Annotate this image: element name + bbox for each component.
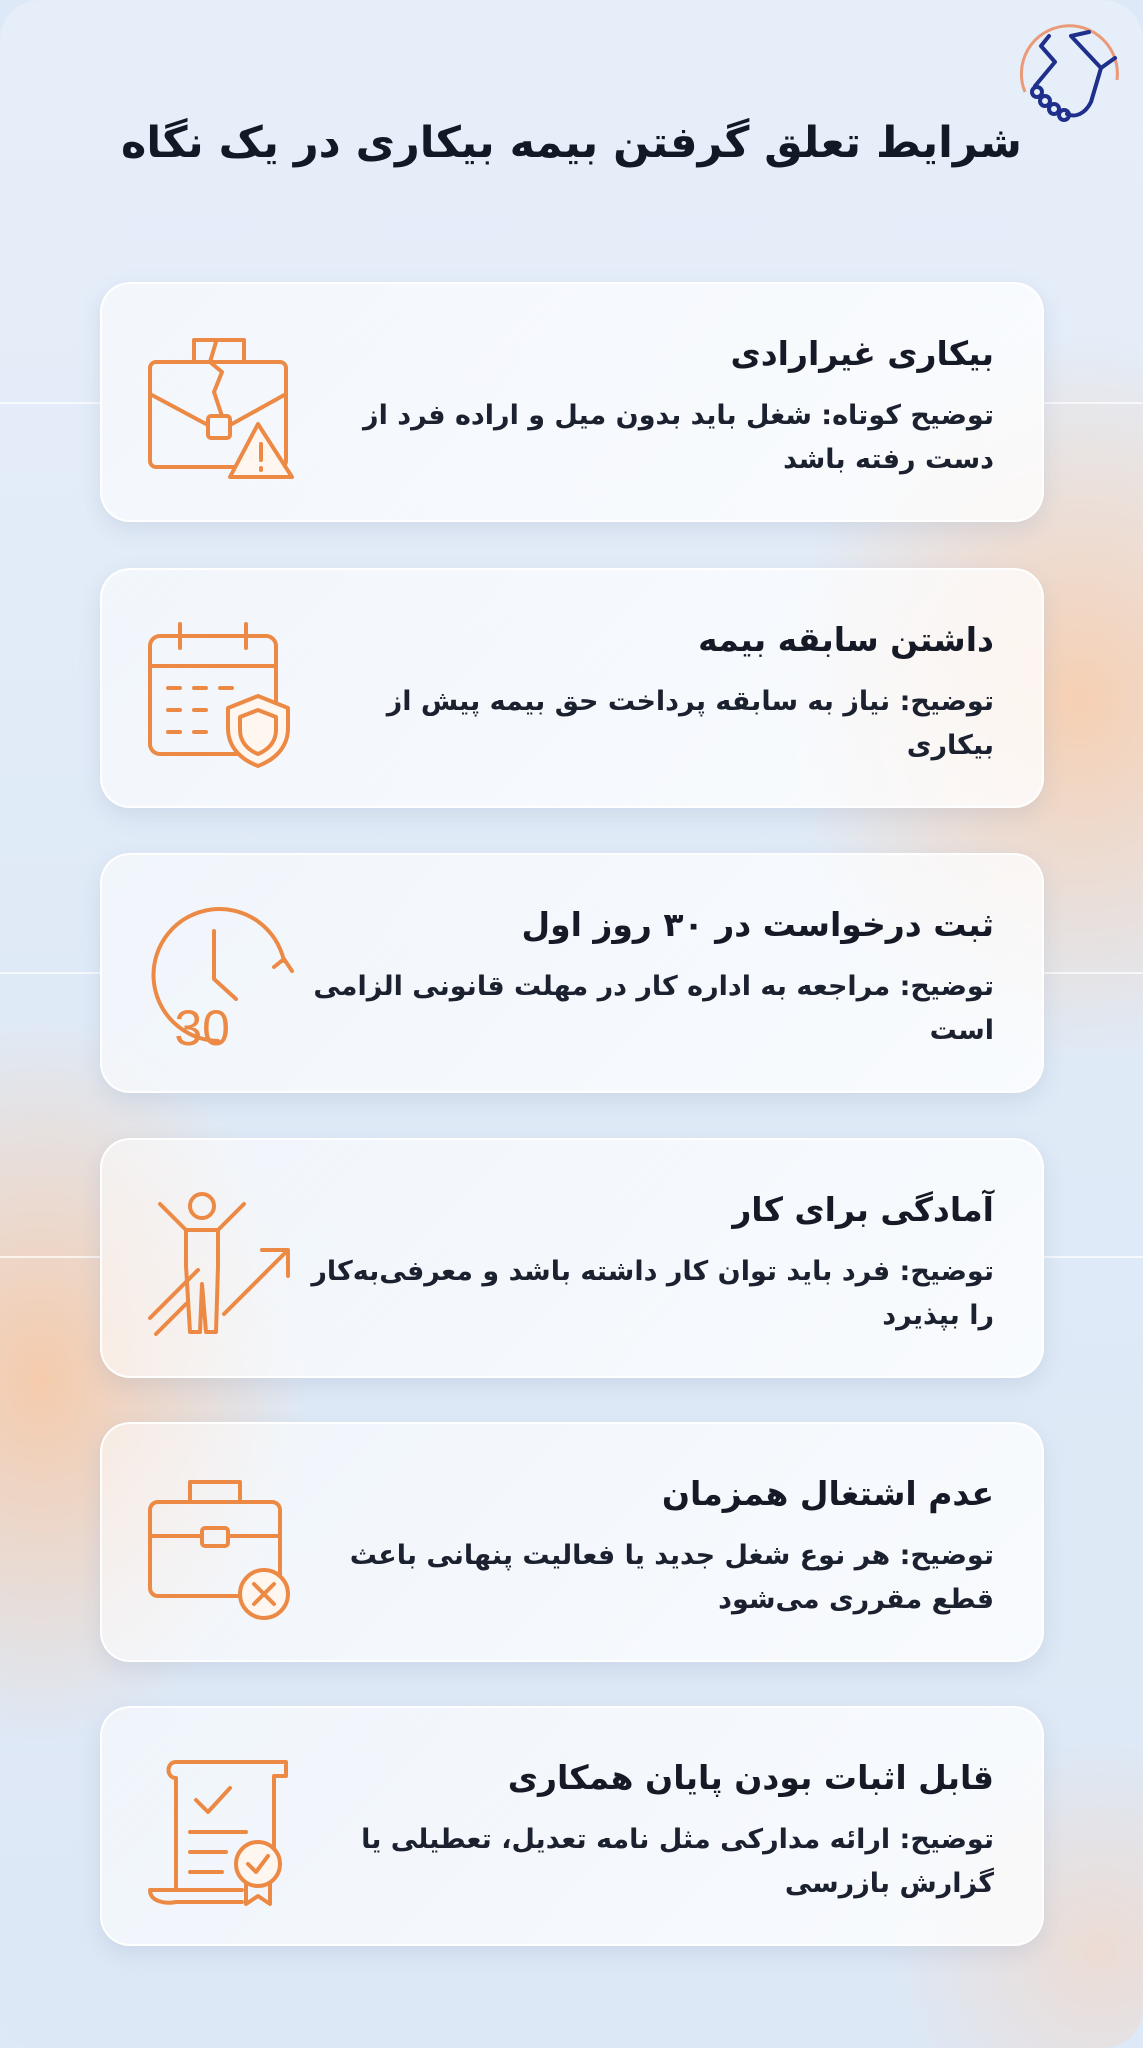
- panel: card 2: [100, 568, 1044, 808]
- heading: آمادگی برای کار: [732, 1190, 994, 1229]
- description: توضیح: مراجعه به اداره کار در مهلت قانونی الزامی است: [313, 971, 994, 1046]
- panel: card 6: [100, 1706, 1044, 1946]
- description: توضیح: هر نوع شغل جدید یا فعالیت پنهانی باعث قطع مقرری می‌شود: [350, 1540, 994, 1615]
- heading: قابل اثبات بودن پایان همکاری: [508, 1758, 994, 1797]
- icon: certificate document: [148, 1760, 288, 1906]
- panel: card 5: [100, 1422, 1044, 1662]
- heading: ثبت درخواست در ۳۰ روز اول: [521, 905, 994, 944]
- icon: calendar with shield: [148, 622, 290, 768]
- icon: briefcase with x: [148, 1480, 290, 1620]
- panel: card 3: [100, 853, 1044, 1093]
- description: توضیح: ارائه مدارکی مثل نامه تعدیل، تعطیلی یا گزارش بازرسی: [361, 1824, 994, 1899]
- description: توضیح کوتاه: شغل باید بدون میل و اراده فرد از دست رفته باشد: [363, 400, 994, 475]
- heading: عدم اشتغال همزمان: [662, 1474, 994, 1513]
- icon: person with rising arrow: [148, 1192, 290, 1336]
- heading: داشتن سابقه بیمه: [698, 620, 994, 659]
- panel: card 4: [100, 1138, 1044, 1378]
- description: توضیح: فرد باید توان کار داشته باشد و معرفی‌به‌کار را بپذیرد: [311, 1256, 994, 1331]
- description: توضیح: نیاز به سابقه پرداخت حق بیمه پیش از بیکاری: [387, 686, 994, 761]
- title: شرایط تعلق گرفتن بیمه بیکاری در یک نگاه: [121, 118, 1022, 168]
- heading: بیکاری غیرارادی: [730, 334, 994, 373]
- icon: broken briefcase with warning: [148, 338, 294, 479]
- icon: clock 30: [152, 907, 294, 1053]
- panel: card 1: [100, 282, 1044, 522]
- logo: handshake: [1020, 24, 1119, 122]
